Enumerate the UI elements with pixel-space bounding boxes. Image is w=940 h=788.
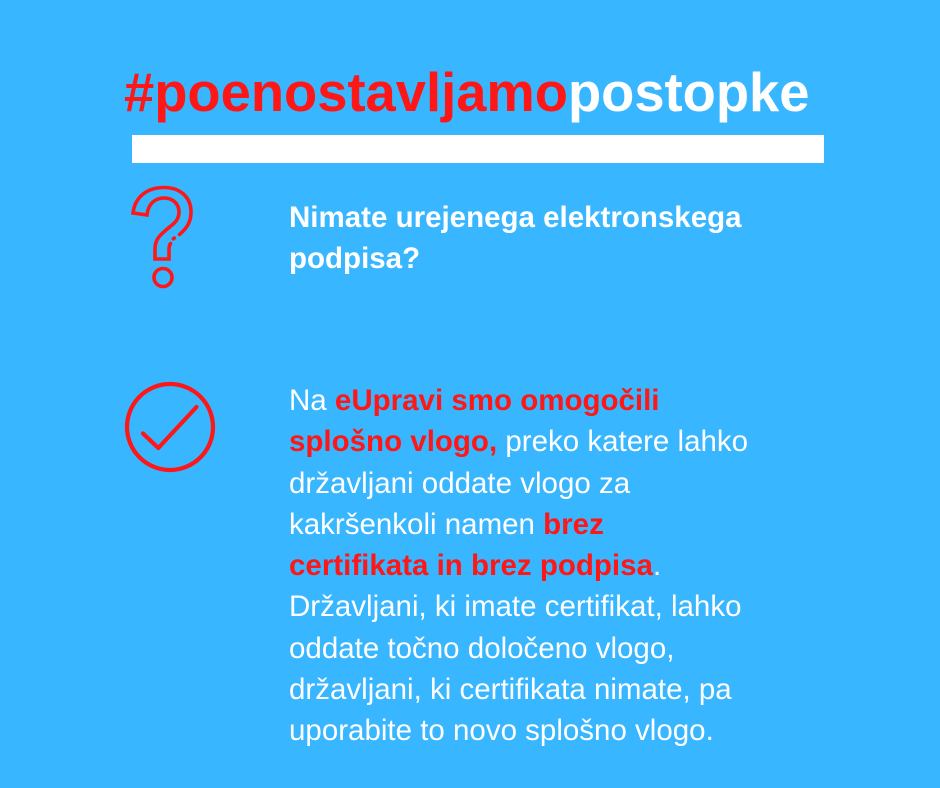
- icon: question mark: [131, 186, 193, 288]
- question text: Nimate urejenega elektronskega: [289, 201, 742, 234]
- answer text: splošno vlogo, preko katere lahko: [289, 425, 748, 458]
- answer text: certifikata in brez podpisa.: [289, 549, 661, 582]
- answer text: državljani, ki certifikata nimate, pa: [289, 673, 732, 706]
- answer text: državljani oddate vlogo za: [289, 466, 630, 500]
- title: #poenostavljamopostopke: [124, 62, 810, 123]
- question text: podpisa?: [289, 242, 420, 275]
- icon: check mark in circle: [124, 382, 216, 472]
- answer text: Na eUpravi smo omogočili: [289, 384, 660, 417]
- answer text: Državljani, ki imate certifikat, lahko: [289, 590, 741, 623]
- question text: [289, 201, 742, 275]
- white banner bar: [132, 135, 824, 163]
- answer text: uporabite to novo splošno vlogo.: [289, 714, 714, 747]
- answer text: [289, 384, 748, 747]
- answer text: kakršenkoli namen brez: [289, 508, 604, 541]
- answer text: oddate točno določeno vlogo,: [289, 632, 674, 664]
